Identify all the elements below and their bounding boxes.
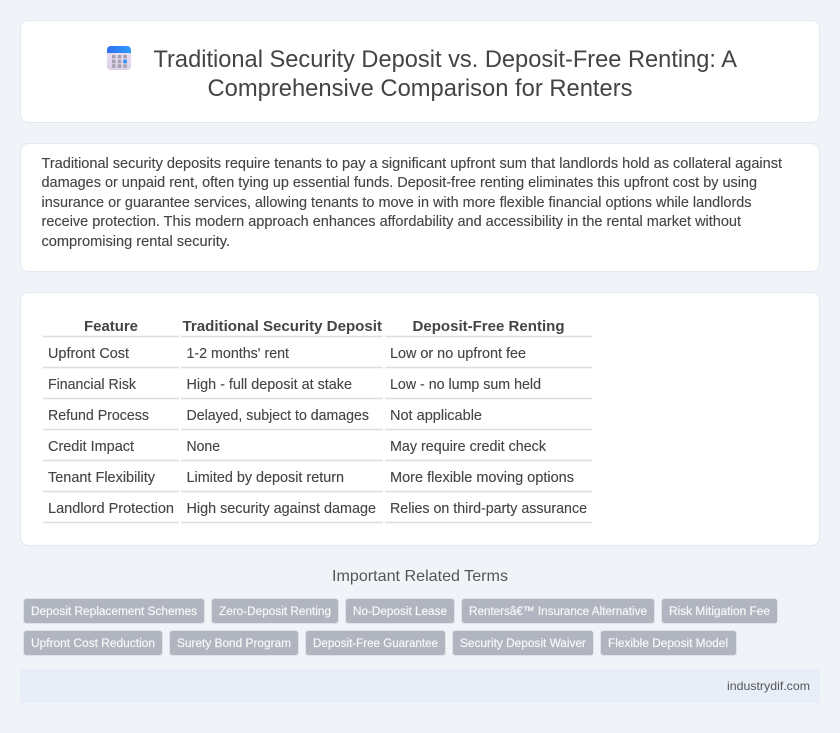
tag: Risk Mitigation Fee	[669, 604, 770, 618]
footer: industrydif.com	[727, 679, 810, 693]
tag: Deposit Replacement Schemes	[31, 604, 197, 618]
tag: Surety Bond Program	[177, 636, 291, 650]
row: upfront cost	[48, 346, 526, 362]
text block: introduction paragraph: Traditional security deposits require tenants to pay a significant upfront sum that landlords hold as collateral against	[42, 156, 782, 172]
panel: comparison table	[20, 292, 820, 546]
row: credit impact: None	[186, 439, 220, 455]
tag: Flexible Deposit Model	[608, 636, 728, 650]
text block: introduction paragraph: insurance or guarantee services, allowing tenants to move in with more flexible financial options while landlords	[42, 195, 752, 211]
tag	[24, 598, 204, 624]
tag	[662, 598, 778, 624]
row: refund process: Not applicable	[390, 408, 482, 424]
tag: Deposit-Free Guarantee	[313, 636, 438, 650]
row: refund process: Delayed, subject to damages	[186, 408, 369, 424]
tag	[170, 630, 298, 656]
text block: introduction paragraph	[42, 156, 782, 250]
tag: Rentersâ€™ Insurance Alternative	[469, 604, 647, 618]
tag	[346, 598, 454, 624]
tag: Upfront Cost Reduction	[31, 636, 155, 650]
tag: Security Deposit Waiver	[460, 636, 586, 650]
row: landlord protection: Landlord Protection	[48, 501, 174, 517]
row: upfront cost: Upfront Cost	[48, 346, 129, 362]
row: tenant flexibility: Limited by deposit return	[186, 470, 344, 486]
row: upfront cost: 1-2 months' rent	[186, 346, 289, 362]
text block: introduction paragraph: receive protection. This modern approach enhances affordability and accessibility in the rental market without	[42, 214, 741, 230]
icon: calendar	[107, 46, 131, 70]
row: financial risk	[48, 377, 541, 393]
row: financial risk: Low - no lump sum held	[390, 377, 541, 393]
tag	[306, 630, 446, 656]
text block: introduction paragraph: compromising rental security.	[42, 234, 230, 250]
panel: header	[20, 20, 820, 122]
tag	[600, 630, 736, 656]
tag	[24, 630, 162, 656]
table header: Traditional Security Deposit	[182, 319, 382, 335]
text block: introduction paragraph: damages or unpaid rent, often tying up essential funds. Deposit-free renting eliminates this upfront cost by using	[42, 175, 757, 191]
related term tags	[24, 598, 778, 656]
row: landlord protection	[48, 501, 587, 517]
title: Comprehensive Comparison for Renters	[208, 75, 632, 102]
panel: introduction	[20, 144, 820, 272]
title	[154, 46, 737, 102]
tag	[212, 598, 338, 624]
row: landlord protection: High security against damage	[186, 501, 376, 517]
row: credit impact: May require credit check	[390, 439, 547, 455]
tag	[452, 630, 594, 656]
row: tenant flexibility	[48, 470, 574, 486]
row: landlord protection: Relies on third-party assurance	[390, 501, 587, 517]
row: refund process	[48, 408, 482, 424]
tag: No-Deposit Lease	[353, 604, 447, 618]
row: financial risk: Financial Risk	[48, 377, 137, 393]
heading: important related terms: Important Related Terms	[332, 568, 508, 585]
tag	[462, 598, 654, 624]
title: Traditional Security Deposit vs. Deposit-Free Renting: A	[154, 46, 737, 73]
table header: Deposit-Free Renting	[412, 319, 564, 335]
row: refund process: Refund Process	[48, 408, 149, 424]
footer	[20, 669, 820, 703]
row: tenant flexibility: More flexible moving options	[390, 470, 574, 486]
table header	[84, 319, 564, 335]
row: credit impact	[48, 439, 547, 455]
row: credit impact: Credit Impact	[48, 439, 134, 455]
row: upfront cost: Low or no upfront fee	[390, 346, 526, 362]
row: tenant flexibility: Tenant Flexibility	[48, 470, 156, 486]
row: financial risk: High - full deposit at stake	[186, 377, 352, 393]
table header: Feature	[84, 319, 138, 335]
tag: Zero-Deposit Renting	[219, 604, 331, 618]
